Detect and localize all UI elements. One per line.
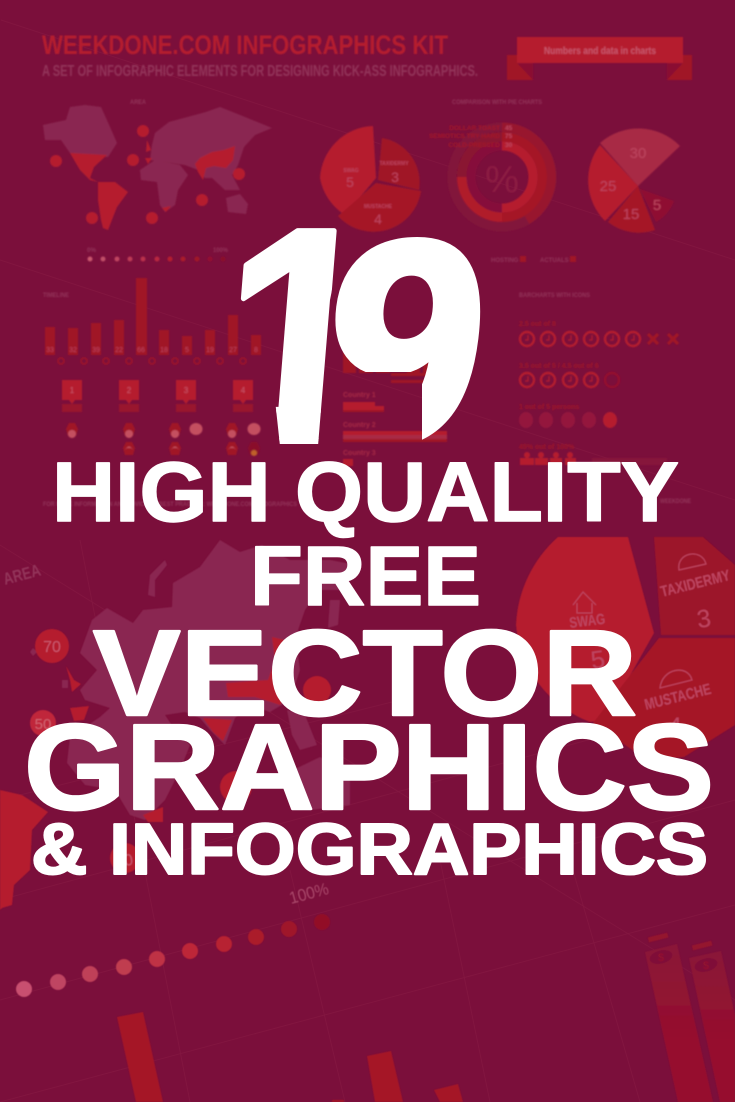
progress dots: 100% bbox=[213, 248, 229, 254]
pie chart: swag taxidermy mustache: SWAG bbox=[343, 168, 359, 174]
footer brand: WEEKDONE bbox=[660, 499, 691, 505]
pie chart: numbers: 30 bbox=[630, 145, 646, 162]
area text: AREA bbox=[1, 561, 43, 589]
numbered markers: 2 bbox=[127, 386, 132, 395]
timeline bar chart: 8 bbox=[254, 347, 258, 354]
enlarged pie chart: 4 bbox=[668, 713, 682, 741]
progress dots: 0% bbox=[87, 248, 97, 254]
world map bbox=[43, 105, 272, 230]
digit 1: 1 bbox=[208, 166, 391, 506]
small people icons bbox=[66, 423, 260, 456]
area label: AREA bbox=[130, 100, 147, 106]
legend bbox=[491, 256, 576, 264]
panel: infographics kit preview bbox=[42, 30, 692, 508]
pie chart: swag taxidermy mustache: 5 bbox=[346, 174, 354, 190]
enlarged pie chart: 3 bbox=[695, 604, 713, 634]
pie chart: numbers: 5 bbox=[653, 197, 661, 214]
ribbon banner bbox=[507, 37, 692, 80]
numbered markers bbox=[62, 380, 253, 412]
pie chart: swag taxidermy mustache: 4 bbox=[374, 211, 382, 227]
enlarged eurasia and africa bbox=[67, 540, 356, 820]
timeline bar chart: 5 bbox=[185, 347, 189, 354]
heading: and infographics: & INFOGRAPHICS bbox=[31, 810, 708, 890]
progress dots large bbox=[16, 914, 330, 997]
red country blobs bbox=[143, 637, 331, 822]
uk highlight bbox=[66, 666, 81, 692]
bubble 50: 50 bbox=[35, 716, 51, 733]
spain highlight bbox=[70, 706, 89, 721]
numbered markers: 4 bbox=[241, 386, 246, 395]
100 percent label: 100% bbox=[287, 879, 331, 908]
timeline bar chart: 18 bbox=[160, 347, 168, 354]
large bars bbox=[117, 1012, 463, 1102]
enlarged pie chart: 5 bbox=[589, 645, 607, 675]
pie section label: COMPARISON WITH PIE CHARTS bbox=[452, 100, 542, 106]
enlarged pie chart: MUSTACHE bbox=[643, 681, 713, 714]
money bars: $ bbox=[658, 952, 664, 964]
money bars: $ bbox=[703, 960, 709, 972]
timeline bar chart: 22 bbox=[115, 347, 123, 354]
timeline bar chart: 32 bbox=[69, 347, 77, 354]
bubble 70 bbox=[35, 629, 69, 663]
country bars: Country 2 bbox=[343, 422, 376, 429]
barcharts with icons bbox=[519, 293, 678, 465]
numbered markers: 1 bbox=[70, 386, 75, 395]
pie chart: numbers: 15 bbox=[623, 206, 639, 223]
pie chart: swag taxidermy mustache: 3 bbox=[391, 169, 399, 185]
legend: ACTUALS bbox=[540, 258, 569, 264]
arctic island, japan and pacific islands bbox=[30, 560, 350, 810]
barcharts with icons: 2.5 out of 8 bbox=[519, 321, 556, 328]
donut chart: 45 bbox=[505, 125, 513, 132]
donut chart bbox=[429, 125, 552, 227]
footer line: FOR MORE INFORMATION AND ADVICE ON BEST PRACTICE: WEEKDONE.COM/INFOGRAPHICS bbox=[43, 502, 297, 508]
barcharts with icons: 45% out of 100% bbox=[519, 444, 575, 451]
timeline bar chart: 19 bbox=[206, 347, 214, 354]
south america bbox=[0, 790, 48, 910]
barcharts with icons: 1 out of 5 persons bbox=[519, 404, 579, 411]
big number 19 bbox=[240, 228, 480, 444]
donut chart: COLD-PRESSED bbox=[448, 142, 500, 149]
numbered markers: 3 bbox=[184, 386, 189, 395]
bubble 70: 70 bbox=[43, 639, 61, 656]
pie chart: numbers: 25 bbox=[600, 178, 616, 195]
donut chart: % bbox=[485, 159, 519, 201]
bubble 80: 80 bbox=[114, 852, 135, 871]
digit 9: 9 bbox=[307, 182, 504, 501]
timeline bar chart: 33 bbox=[46, 347, 54, 354]
barcharts with icons: 3.5 out of 5 / 4.5 out of 6 bbox=[519, 363, 599, 370]
pie chart: swag taxidermy mustache: TAXIDERMY bbox=[379, 161, 409, 167]
panel: enlarged map background bbox=[0, 537, 735, 1102]
donut chart: SEMIOTICS TRY-HARD bbox=[429, 133, 500, 140]
bubble 50 bbox=[30, 710, 56, 736]
country bars bbox=[343, 392, 447, 466]
progress dots bbox=[87, 248, 229, 262]
timeline label: TIMELINE bbox=[43, 293, 69, 299]
ribbon banner: Numbers and data in charts bbox=[544, 46, 656, 57]
timeline bar chart bbox=[45, 278, 261, 364]
pie chart: numbers bbox=[588, 128, 680, 233]
heading: high quality: HIGH QUALITY bbox=[52, 445, 679, 539]
enlarged pie chart bbox=[516, 537, 735, 760]
donut chart: 75 bbox=[505, 133, 513, 140]
heading: vector: VECTOR bbox=[93, 605, 637, 741]
timeline bar chart: 66 bbox=[137, 347, 145, 354]
country bars: Country 3 bbox=[343, 450, 376, 457]
donut chart: 30 bbox=[505, 142, 513, 149]
country bars: Country 1 bbox=[343, 392, 376, 399]
timeline bar chart: 27 bbox=[229, 347, 237, 354]
barcharts with icons: BARCHARTS WITH ICONS bbox=[519, 293, 590, 299]
donut chart: DOLLAR TOAST bbox=[449, 125, 500, 132]
enlarged pie chart: SWAG bbox=[568, 611, 606, 632]
heading: graphics: GRAPHICS bbox=[24, 699, 714, 835]
kit subtitle: A SET OF INFOGRAPHIC ELEMENTS FOR DESIGNING KICK-ASS INFOGRAPHICS. bbox=[42, 63, 478, 80]
heading: free: FREE bbox=[250, 529, 481, 623]
kit title: WEEKDONE.COM INFOGRAPHICS KIT bbox=[42, 30, 448, 60]
column chart bbox=[343, 343, 433, 383]
pie chart: swag taxidermy mustache bbox=[320, 126, 421, 232]
timeline bar chart: 39 bbox=[92, 347, 100, 354]
money bars bbox=[645, 933, 735, 1102]
pie chart: swag taxidermy mustache: MUSTACHE bbox=[364, 204, 393, 210]
legend: HOSTING bbox=[491, 258, 519, 264]
bubble 80 bbox=[110, 843, 140, 873]
